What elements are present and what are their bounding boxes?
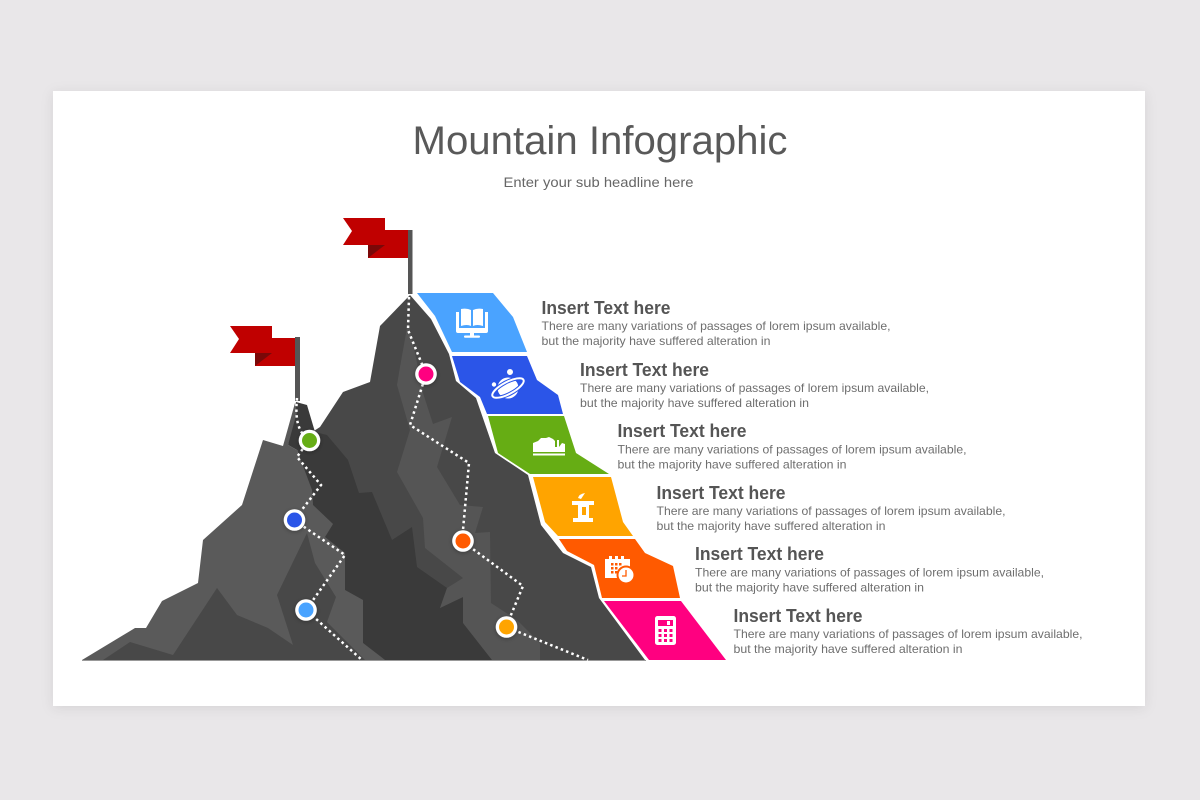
text block 2: [580, 359, 929, 410]
icon: boots: [533, 437, 565, 456]
text block 2: but the majority have suffered alteration in: [580, 396, 809, 410]
text block 1: but the majority have suffered alteration in: [542, 334, 770, 348]
dotted route: left peak: [294, 398, 362, 660]
dark core of mountain: [288, 402, 492, 660]
icon: calculator: [655, 616, 676, 645]
ground line: [82, 660, 646, 661]
text block 1: Insert Text here: [542, 297, 670, 318]
text block 3: There are many variations of passages of lorem ipsum available,: [618, 442, 966, 456]
marker: blue: [284, 509, 305, 531]
icon: book on monitor: [456, 309, 488, 338]
marker: pink: [415, 363, 437, 385]
title: Mountain Infographic: [412, 119, 788, 163]
text block 4: [656, 482, 1006, 533]
marker: amber: [496, 616, 517, 638]
band 5: orange: [559, 539, 680, 598]
text block 1: [542, 297, 890, 348]
front left ridge: [82, 403, 385, 660]
text block 5: Insert Text here: [695, 543, 824, 564]
text block 2: Insert Text here: [580, 359, 709, 380]
text block 3: Insert Text here: [618, 420, 746, 441]
text block 3: [618, 420, 966, 472]
band 6: pink: [604, 601, 726, 660]
text block 5: [695, 543, 1044, 594]
text block 6: [734, 605, 1082, 656]
band 2: blue: [452, 356, 563, 414]
icon: planet: [490, 369, 526, 402]
front lower shadow: [103, 533, 365, 660]
band 1: light blue: [417, 293, 527, 352]
text block 4: but the majority have suffered alteration in: [656, 519, 886, 533]
mountain illustration: [82, 295, 646, 661]
dotted route: main peak: [408, 297, 588, 660]
band 4: amber: [533, 477, 633, 536]
text block 6: Insert Text here: [734, 605, 862, 626]
text block 1: There are many variations of passages of lorem ipsum available,: [542, 319, 890, 333]
icon: podium: [572, 493, 594, 522]
text block 2: There are many variations of passages of lorem ipsum available,: [580, 381, 929, 395]
text block 6: There are many variations of passages of lorem ipsum available,: [734, 627, 1082, 641]
main mountain: [300, 295, 645, 660]
flag: left peak: [230, 326, 300, 401]
panel: white card: [53, 91, 1145, 706]
text block 6: but the majority have suffered alteration in: [734, 642, 962, 656]
marker: light blue: [295, 599, 317, 621]
text block 5: but the majority have suffered alteration in: [695, 580, 924, 594]
marker: orange: [452, 530, 474, 552]
text block 5: There are many variations of passages of lorem ipsum available,: [695, 566, 1044, 580]
marker: green: [299, 430, 320, 451]
central light ridge: [397, 322, 540, 660]
text block 4: There are many variations of passages of lorem ipsum available,: [656, 504, 1006, 518]
icon: calendar with clock: [605, 556, 636, 584]
band 3: green: [488, 416, 609, 474]
flag: main peak: [343, 218, 412, 294]
text block 3: but the majority have suffered alteration in: [618, 458, 846, 472]
subtitle: Enter your sub headline here: [504, 174, 694, 190]
text block 4: Insert Text here: [656, 482, 786, 503]
